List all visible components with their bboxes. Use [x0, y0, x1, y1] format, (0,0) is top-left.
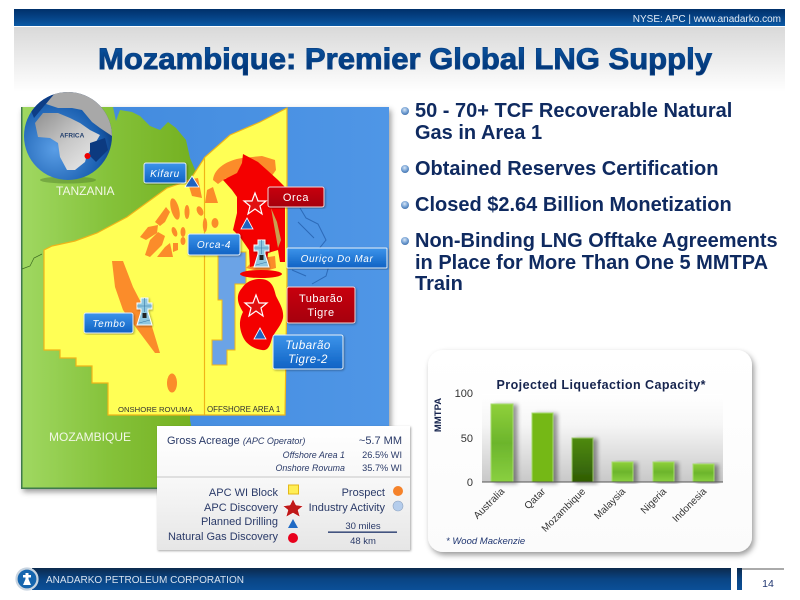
header band — [14, 9, 785, 92]
bullet 4 — [401, 230, 778, 295]
icon: company logo — [16, 568, 38, 590]
plot area — [482, 394, 723, 482]
legend: apc wi block — [209, 485, 298, 499]
bar: qatar — [532, 413, 553, 482]
scale bar: 48 km — [350, 536, 376, 547]
callout: tubarao tigre-2: Tubarão — [285, 340, 331, 352]
y axis labels: 100 — [455, 388, 473, 400]
y axis labels: 0 — [467, 477, 473, 489]
bar: indonesia — [693, 464, 714, 482]
callout: kifaru: Kifaru — [150, 169, 180, 180]
bullet 4: Train — [415, 273, 463, 295]
sliver between discoveries — [271, 208, 281, 248]
scale bar: 30 miles — [345, 521, 381, 532]
bullet 3: Closed $2.64 Billion Monetization — [415, 194, 732, 216]
bullet 4: in Place for More Than One 5 MMTPA — [415, 252, 768, 274]
legend: apc discovery: APC Discovery — [204, 502, 278, 514]
x axis labels: Nigeria — [639, 486, 669, 517]
callout: orca: Orca — [283, 192, 309, 204]
x axis labels: Australia — [472, 486, 507, 522]
offshore area row: Offshore Area 1 — [283, 450, 345, 460]
label: offshore area 1: OFFSHORE AREA 1 — [207, 405, 280, 414]
bullet 1: Gas in Area 1 — [415, 122, 542, 144]
bullet list — [401, 100, 778, 295]
y axis labels: 50 — [461, 433, 473, 445]
marker: kifaru planned drilling — [185, 176, 199, 187]
callout: orca — [268, 187, 324, 207]
legend: prospect — [342, 486, 403, 499]
legend: natural gas discovery: Natural Gas Discovery — [168, 531, 278, 543]
label: tanzania: TANZANIA — [56, 184, 114, 198]
onshore row: Onshore Rovuma — [275, 463, 345, 473]
callout: ourico do mar — [287, 248, 387, 268]
onshore interest: 35.7% WI — [362, 463, 402, 473]
x axis line — [482, 482, 723, 483]
title: Mozambique: Premier Global LNG Supply — [98, 43, 712, 76]
bar: nigeria — [653, 462, 674, 482]
marker: tubarao planned drilling — [254, 328, 266, 339]
panel: liquefaction chart — [428, 350, 752, 552]
callout: tubarao tigre: Tubarão — [299, 293, 343, 305]
y axis labels — [455, 388, 473, 489]
callout: tembo — [84, 313, 133, 333]
callout: tubarao tigre-2: Tigre-2 — [288, 354, 328, 366]
y axis title: MMTPA — [433, 398, 444, 432]
footer bar — [16, 568, 784, 590]
marker: orca planned drilling — [241, 218, 253, 229]
panel: map — [21, 107, 389, 489]
panel: acreage and legend — [157, 426, 410, 550]
callout: tubarao tigre-2 — [273, 335, 343, 369]
legend: apc wi block: APC WI Block — [209, 487, 278, 499]
legend: apc discovery — [204, 499, 303, 517]
callout: kifaru — [144, 163, 186, 183]
source note: * Wood Mackenzie — [446, 536, 525, 547]
legend: prospect: Prospect — [342, 487, 385, 499]
chart title: Projected Liquefaction Capacity* — [496, 378, 706, 392]
inner water — [212, 252, 246, 365]
bar: mozambique — [572, 438, 593, 482]
bullet 1 — [401, 100, 732, 144]
offshore interest: 26.5% WI — [362, 450, 402, 460]
mainland coast outline — [292, 208, 330, 284]
prospects — [112, 156, 276, 392]
natural gas discoveries — [223, 154, 285, 350]
gross acreage value: ~5.7 MM — [359, 435, 402, 447]
ticker and website: NYSE: APC | www.anadarko.com — [633, 14, 781, 25]
callout: orca-4 — [188, 234, 240, 255]
x axis labels: Indonesia — [671, 486, 709, 525]
x axis labels — [472, 486, 709, 535]
callout: orca-4: Orca-4 — [197, 240, 231, 251]
bullet 2: Obtained Reserves Certification — [415, 158, 718, 180]
marker: orca discovery star — [244, 193, 266, 214]
x axis labels: Mozambique — [540, 486, 588, 535]
yellow block — [44, 108, 287, 415]
scale bar — [328, 521, 397, 547]
page number: 14 — [762, 578, 774, 590]
callout: ourico do mar: Ouriço Do Mar — [301, 254, 373, 265]
bullet 1: 50 - 70+ TCF Recoverable Natural — [415, 100, 732, 122]
location marker — [84, 153, 90, 159]
callout: tubarao tigre — [287, 287, 355, 323]
bar: australia — [491, 404, 513, 482]
legend: planned drilling: Planned Drilling — [201, 516, 278, 528]
bar: malaysia — [612, 462, 633, 482]
land — [21, 107, 196, 489]
label: africa: AFRICA — [60, 132, 85, 140]
bullet 4: Non-Binding LNG Offtake Agreements — [415, 230, 778, 252]
company name: ANADARKO PETROLEUM CORPORATION — [46, 575, 244, 586]
marker: tubarao discovery star — [245, 295, 267, 316]
legend: industry activity: Industry Activity — [309, 502, 385, 514]
drilling markers — [137, 176, 269, 339]
callout: tubarao tigre: Tigre — [307, 307, 335, 319]
x axis labels: Qatar — [523, 486, 549, 512]
callout: tembo: Tembo — [92, 319, 126, 330]
border line — [22, 254, 42, 269]
gross acreage row: Gross Acreage (APC Operator) — [167, 435, 305, 447]
icon: tembo rig — [137, 298, 152, 325]
icon: orca-4 rig — [254, 240, 269, 267]
x axis labels: Malaysia — [592, 486, 628, 522]
icon: globe — [24, 92, 115, 184]
label: mozambique: MOZAMBIQUE — [49, 430, 131, 444]
label: onshore rovuma: ONSHORE ROVUMA — [118, 405, 194, 414]
